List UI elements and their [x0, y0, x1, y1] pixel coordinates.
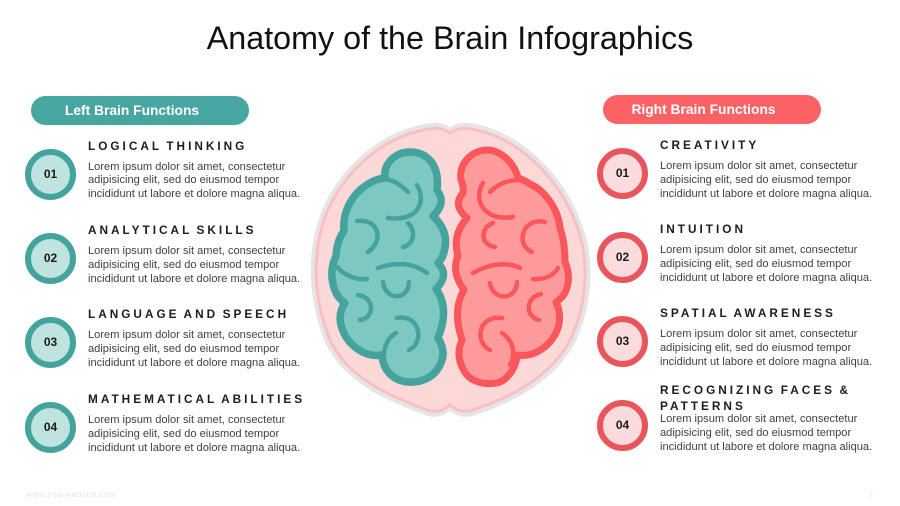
- body text: [88, 245, 300, 285]
- number badge 01: 01: [616, 166, 629, 180]
- body text: adipisicing elit, sed do eiusmod tempor: [88, 174, 279, 186]
- heading: [660, 383, 851, 413]
- body text: [660, 244, 872, 284]
- body text: incididunt ut labore et dolore magna aliqua.: [88, 357, 300, 369]
- body text: adipisicing elit, sed do eiusmod tempor: [660, 258, 851, 270]
- body text: adipisicing elit, sed do eiusmod tempor: [88, 428, 279, 440]
- body text: adipisicing elit, sed do eiusmod tempor: [88, 259, 279, 271]
- body text: Lorem ipsum dolor sit amet, consectetur: [88, 329, 285, 341]
- heading: SPATIAL AWARENESS: [660, 306, 836, 320]
- number badge 02: [25, 233, 76, 284]
- heading: RECOGNIZING FACES &: [660, 383, 851, 397]
- title: Anatomy of the Brain Infographics: [207, 20, 693, 56]
- body text: adipisicing elit, sed do eiusmod tempor: [88, 343, 279, 355]
- body text: [88, 160, 300, 200]
- body text: adipisicing elit, sed do eiusmod tempor: [660, 342, 851, 354]
- number badge 03: 03: [616, 334, 629, 348]
- left item 4: mathematical abilities: [25, 392, 305, 454]
- heading: ANALYTICAL SKILLS: [88, 223, 256, 237]
- body text: incididunt ut labore et dolore magna aliqua.: [660, 441, 872, 453]
- right hemisphere: [456, 150, 568, 384]
- number badge 02: 02: [44, 251, 57, 265]
- right item 3: spatial awareness: [597, 306, 872, 368]
- body text: Lorem ipsum dolor sit amet, consectetur: [660, 413, 857, 425]
- body text: [88, 414, 300, 454]
- number badge 04: 04: [616, 418, 629, 432]
- body text: Lorem ipsum dolor sit amet, consectetur: [88, 414, 285, 426]
- heading pill: right brain functions: Right Brain Functions: [631, 102, 776, 117]
- heading pill: right brain functions: [603, 95, 821, 124]
- body text: incididunt ut labore et dolore magna aliqua.: [88, 188, 300, 200]
- heading: LANGUAGE AND SPEECH: [88, 307, 289, 321]
- heading: MATHEMATICAL ABILITIES: [88, 392, 305, 406]
- right item 2: intuition: [597, 222, 872, 284]
- number badge 03: [597, 316, 648, 367]
- body text: adipisicing elit, sed do eiusmod tempor: [660, 427, 851, 439]
- left item 2: analytical skills: [25, 223, 300, 285]
- number badge 01: [597, 148, 648, 199]
- body text: [660, 328, 872, 368]
- body text: incididunt ut labore et dolore magna aliqua.: [88, 442, 300, 454]
- body text: incididunt ut labore et dolore magna aliqua.: [660, 272, 872, 284]
- number badge 01: [25, 149, 76, 200]
- heading: PATTERNS: [660, 399, 746, 413]
- left item 1: logical thinking: [25, 139, 300, 200]
- right item 4: recognizing faces and patterns: [597, 383, 872, 453]
- right item 1: creativity: [597, 138, 872, 200]
- body text: Lorem ipsum dolor sit amet, consectetur: [660, 160, 857, 172]
- body text: Lorem ipsum dolor sit amet, consectetur: [660, 244, 857, 256]
- body text: incididunt ut labore et dolore magna aliqua.: [88, 273, 300, 285]
- heading pill: left brain functions: [31, 96, 249, 125]
- body text: Lorem ipsum dolor sit amet, consectetur: [88, 245, 285, 257]
- number badge 04: [25, 402, 76, 453]
- body text: Lorem ipsum dolor sit amet, consectetur: [660, 328, 857, 340]
- heading: CREATIVITY: [660, 138, 759, 152]
- heading: INTUITION: [660, 222, 746, 236]
- body text: incididunt ut labore et dolore magna aliqua.: [660, 356, 872, 368]
- number badge 04: [597, 400, 648, 451]
- number badge 02: 02: [616, 250, 629, 264]
- heading: LOGICAL THINKING: [88, 139, 247, 153]
- body text: incididunt ut labore et dolore magna aliqua.: [660, 188, 872, 200]
- body text: [88, 329, 300, 369]
- body text: [660, 160, 872, 200]
- number badge 02: [597, 232, 648, 283]
- heading pill: left brain functions: Left Brain Functions: [65, 103, 199, 118]
- footer page number: 7: [869, 490, 873, 499]
- footer website: www.yourwebsite.com: [26, 490, 117, 499]
- number badge 01: 01: [44, 167, 57, 181]
- head outline: [313, 125, 588, 415]
- number badge 04: 04: [44, 420, 57, 434]
- body text: adipisicing elit, sed do eiusmod tempor: [660, 174, 851, 186]
- body text: Lorem ipsum dolor sit amet, consectetur: [88, 160, 285, 172]
- number badge 03: 03: [44, 335, 57, 349]
- left item 3: language and speech: [25, 307, 300, 369]
- body text: [660, 413, 872, 453]
- left hemisphere: [332, 152, 446, 382]
- number badge 03: [25, 317, 76, 368]
